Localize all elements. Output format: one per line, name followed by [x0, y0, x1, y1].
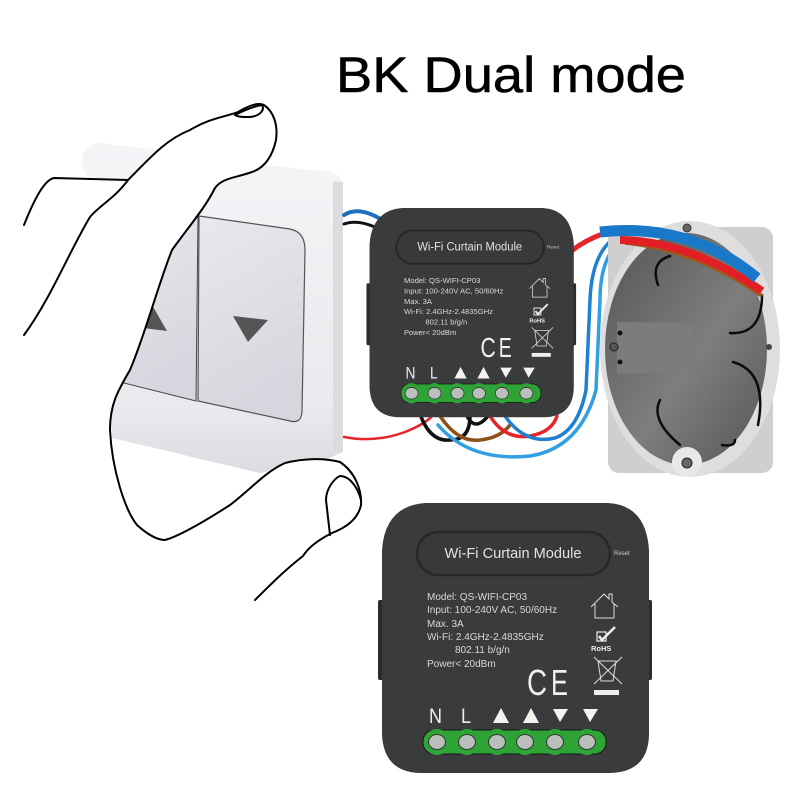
hand outline [0, 104, 361, 620]
spec text: Wi-Fi: 2.4GHz-2.4835GHz [404, 307, 493, 316]
module name: Wi-Fi Curtain Module [444, 545, 582, 562]
CE mark [480, 332, 512, 363]
spec text: Model: QS-WIFI-CP03 [404, 276, 480, 285]
spec text: Power< 20dBm [404, 328, 456, 337]
module body [382, 503, 649, 773]
spec text [404, 276, 503, 337]
hand contour: index finger and palm [24, 104, 361, 600]
mounting plate [608, 227, 773, 473]
terminal screws [405, 387, 533, 399]
screw holes [610, 224, 772, 364]
fingernail [235, 105, 263, 117]
CE mark: C [527, 662, 547, 703]
terminal labels: N [429, 705, 442, 728]
spec text: 802.11 b/g/n [425, 317, 467, 326]
CE mark: E [499, 332, 512, 363]
wall switch [82, 143, 343, 473]
wiring between switch, module and back box [344, 211, 630, 457]
spec text: Input: 100-240V AC, 50/60Hz [427, 605, 557, 616]
key arrow down [233, 316, 268, 342]
icon: house [591, 594, 618, 618]
spec text: Wi-Fi: 2.4GHz-2.4835GHz [427, 632, 544, 643]
thumbnail [326, 476, 361, 535]
box interior [605, 233, 767, 465]
terminal labels [405, 364, 535, 383]
spec text [427, 592, 557, 670]
cable bundle [600, 230, 762, 296]
module side clips [366, 283, 576, 345]
icon: house [529, 279, 550, 297]
bottom screw lug [672, 447, 702, 477]
module side clips [378, 600, 652, 680]
hand shape [0, 104, 361, 620]
switch plate [82, 143, 343, 473]
name pill [417, 532, 610, 575]
icon: WEEE bin [532, 327, 553, 357]
green terminal block [423, 729, 606, 755]
CE mark: E [551, 662, 568, 703]
switch keys [112, 215, 305, 422]
box rim [600, 221, 780, 477]
green terminal block [401, 383, 541, 403]
terminal labels: L [430, 364, 438, 383]
terminal labels: L [461, 705, 471, 728]
CE mark: C [480, 332, 496, 363]
icon: RoHS: RoHS [529, 319, 545, 325]
small wired module [366, 208, 576, 417]
terminal labels [429, 705, 598, 728]
large module [378, 503, 652, 773]
key arrow up [135, 305, 167, 331]
module body [370, 208, 574, 417]
spec text: Model: QS-WIFI-CP03 [427, 592, 527, 603]
spec text: 802.11 b/g/n [455, 645, 510, 656]
knockout slots [656, 256, 762, 445]
icon: RoHS [529, 304, 548, 325]
centre boss [617, 322, 695, 374]
reset label: Reset [614, 551, 630, 557]
spec text: Max. 3A [404, 297, 433, 306]
spec text: Input: 100-240V AC, 50/60Hz [404, 286, 503, 295]
reset label: Reset [547, 244, 560, 249]
module name: Wi-Fi Curtain Module [417, 242, 522, 254]
terminal screws [428, 734, 596, 750]
spec text: Max. 3A [427, 619, 464, 630]
hand contour: back of hand [24, 180, 128, 335]
terminal labels: N [405, 364, 415, 383]
icon: WEEE bin [594, 657, 622, 695]
name pill [396, 230, 544, 264]
plate side edge [333, 182, 343, 452]
icon: RoHS [591, 627, 615, 653]
icon: RoHS: RoHS [591, 644, 611, 653]
CE mark [527, 662, 568, 703]
title: BK Dual mode [336, 47, 686, 103]
back box [600, 221, 780, 477]
spec text: Power< 20dBm [427, 659, 496, 670]
